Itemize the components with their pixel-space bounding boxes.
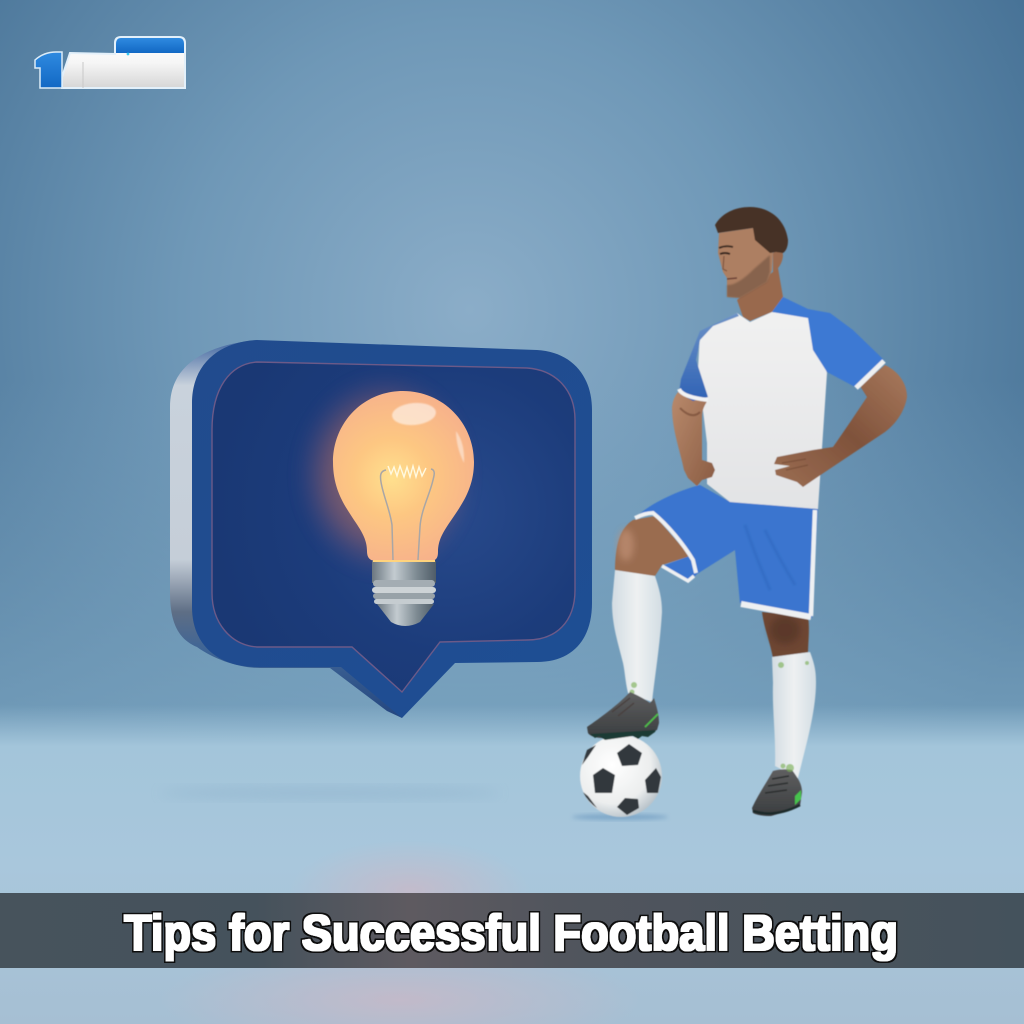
speech bubble with light bulb <box>170 340 592 718</box>
bubble 3D side <box>170 340 402 718</box>
title text: Tips for Successful Football Betting <box>124 905 898 961</box>
bulb halo <box>293 370 477 580</box>
shorts <box>635 485 818 618</box>
back boot <box>752 769 802 816</box>
back leg <box>762 612 809 658</box>
right arm <box>774 365 907 487</box>
neck <box>737 268 783 321</box>
bulb screw base <box>372 561 436 626</box>
back sock <box>772 652 816 778</box>
background wall <box>0 0 1024 800</box>
bubble inner panel <box>212 362 575 692</box>
sock green flecks <box>630 661 809 772</box>
jersey right sleeve <box>772 297 884 388</box>
left arm <box>672 392 715 486</box>
football <box>580 735 662 817</box>
raised thigh <box>615 516 690 576</box>
jersey torso <box>698 312 827 509</box>
bulb highlights <box>391 401 464 463</box>
logo <box>35 37 185 88</box>
floor <box>0 705 1024 1024</box>
bulb filament <box>381 466 434 560</box>
bubble front ring <box>192 340 592 718</box>
bulb glass <box>333 391 474 561</box>
front boot <box>587 692 659 740</box>
title banner <box>0 893 1024 968</box>
ball shadow <box>572 814 668 820</box>
footballer <box>580 207 907 817</box>
jersey left sleeve <box>679 313 739 401</box>
head <box>715 207 788 298</box>
front sock <box>612 570 662 702</box>
